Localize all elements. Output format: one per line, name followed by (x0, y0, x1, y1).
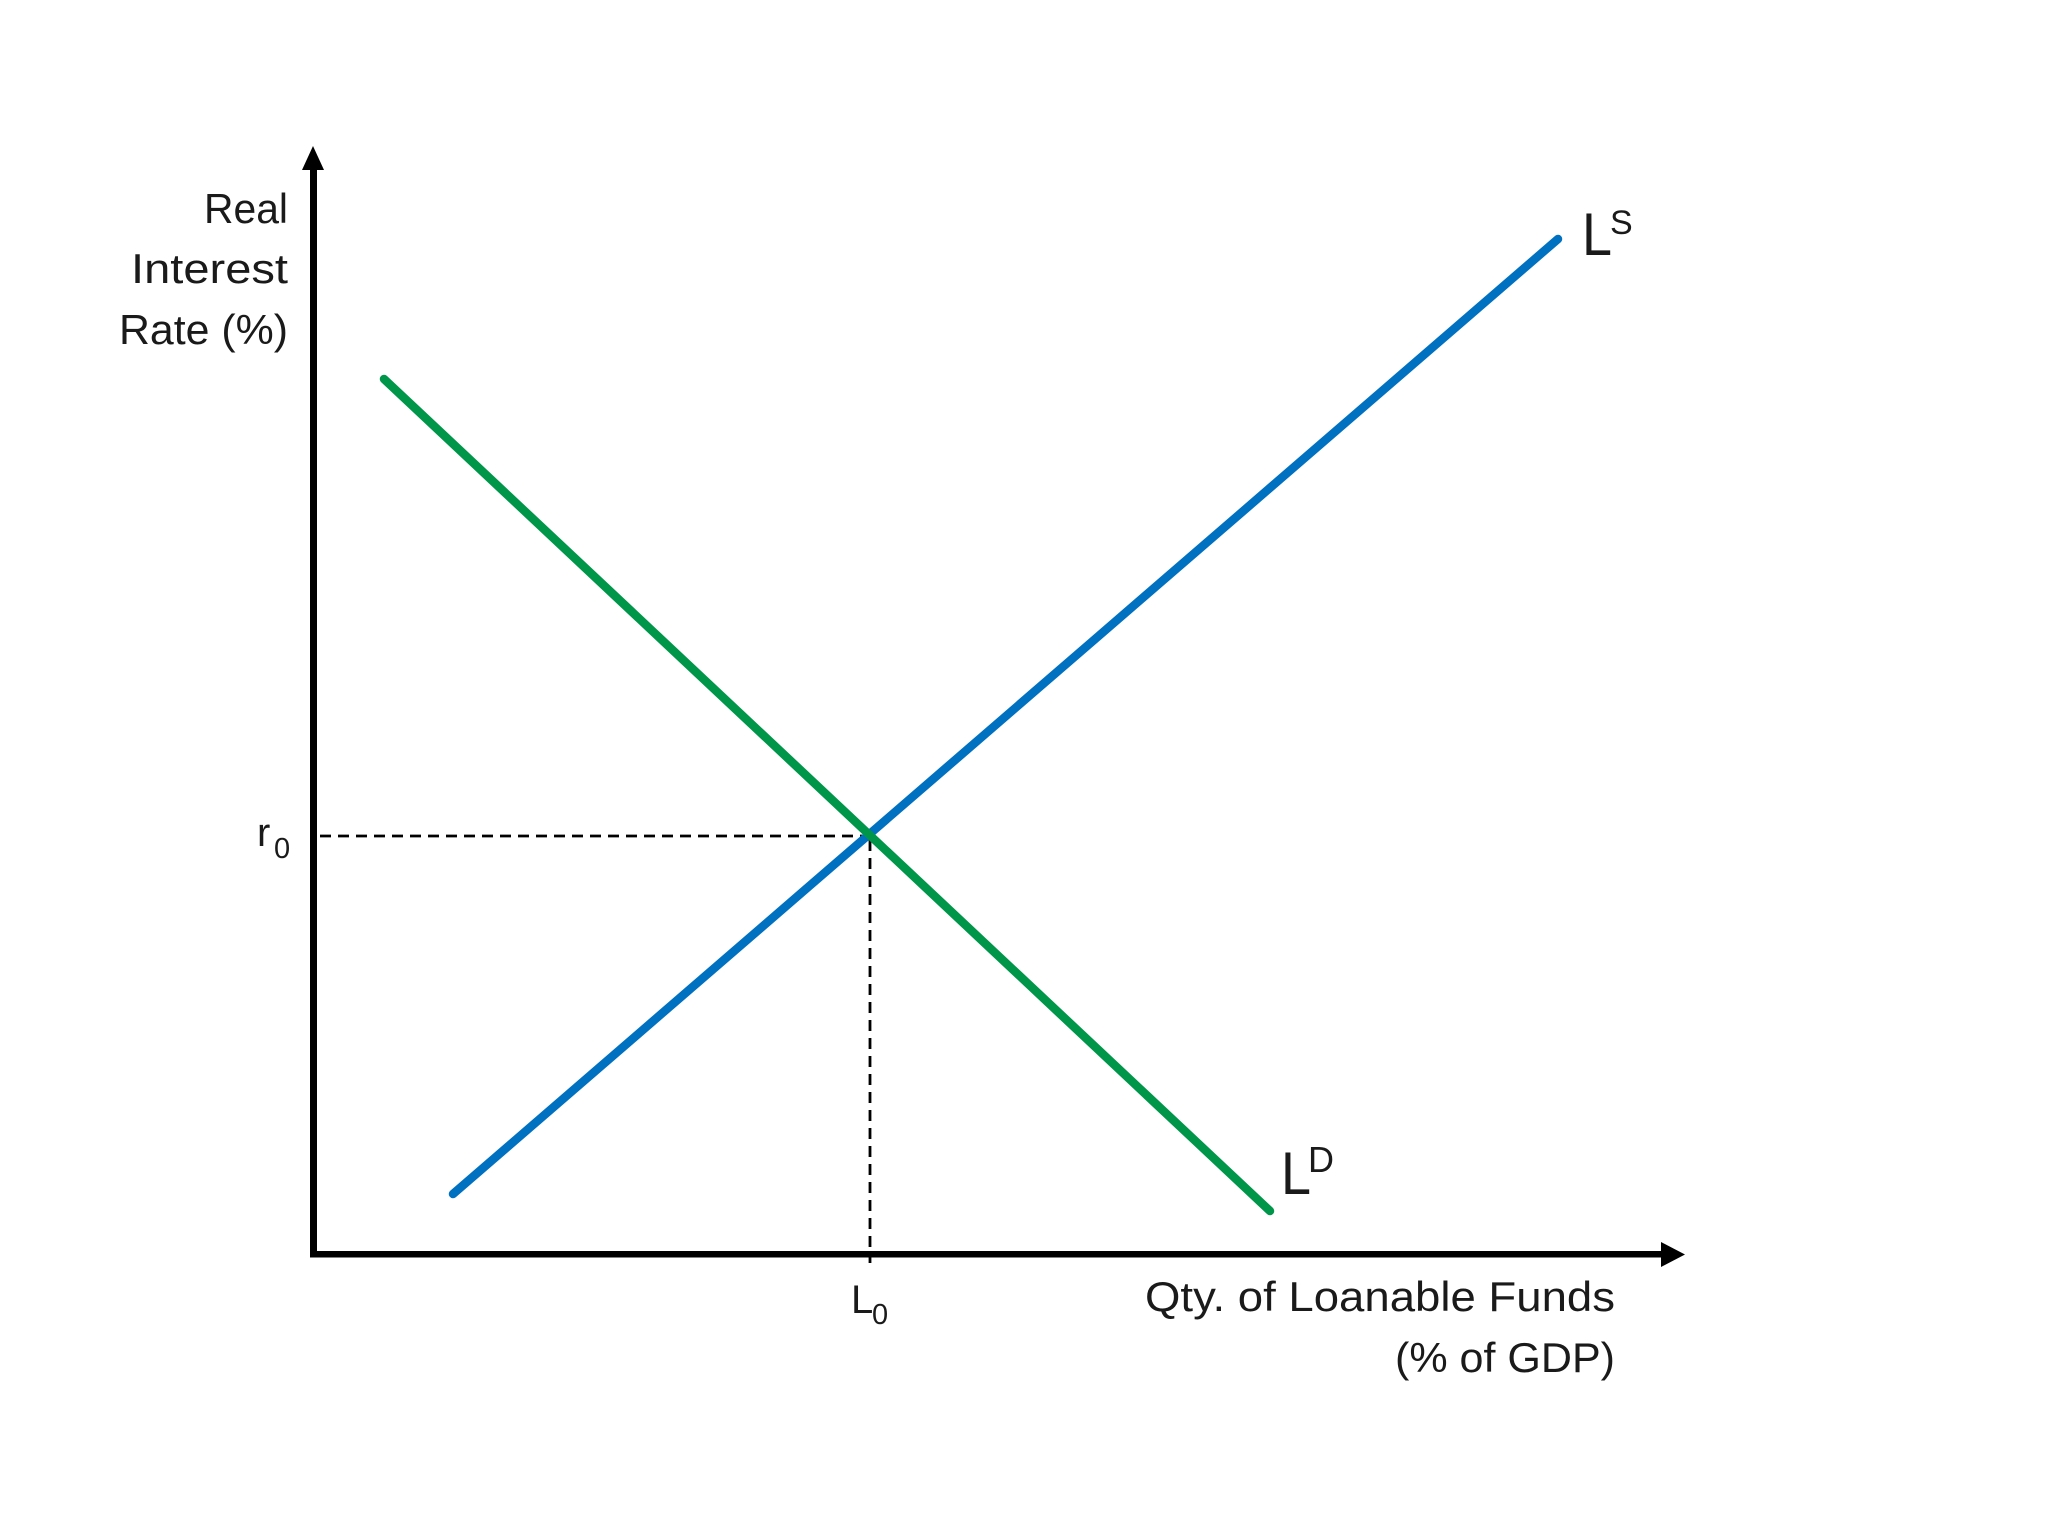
label: LS: L (1582, 201, 1612, 268)
x axis title: Qty. of Loanable Funds (1145, 1273, 1615, 1320)
dashed guide to r0 (320, 835, 868, 837)
dashed guide to L0 (869, 840, 871, 1263)
label: L0: 0 (872, 1299, 888, 1331)
demand curve LD (384, 379, 1270, 1211)
label: LS: S (1610, 204, 1633, 242)
label: L0: L (851, 1278, 873, 1322)
y axis title (119, 185, 288, 353)
label: LD: L (1281, 1140, 1311, 1207)
label: r0 (257, 811, 290, 865)
x axis title (1145, 1273, 1615, 1381)
supply curve LS (453, 239, 1558, 1194)
y axis title: Interest (131, 245, 288, 292)
y axis title: Real (204, 185, 288, 232)
x axis title: (% of GDP) (1395, 1334, 1615, 1381)
y axis with arrow (302, 146, 324, 1257)
label: r0: r (257, 811, 270, 855)
label: LD: D (1308, 1139, 1334, 1180)
label: L0 (851, 1278, 888, 1331)
label: r0: 0 (274, 833, 290, 865)
y axis title: Rate (%) (119, 306, 288, 353)
x axis with arrow (310, 1242, 1685, 1267)
label: LS (1582, 201, 1633, 268)
label: LD (1281, 1139, 1334, 1207)
